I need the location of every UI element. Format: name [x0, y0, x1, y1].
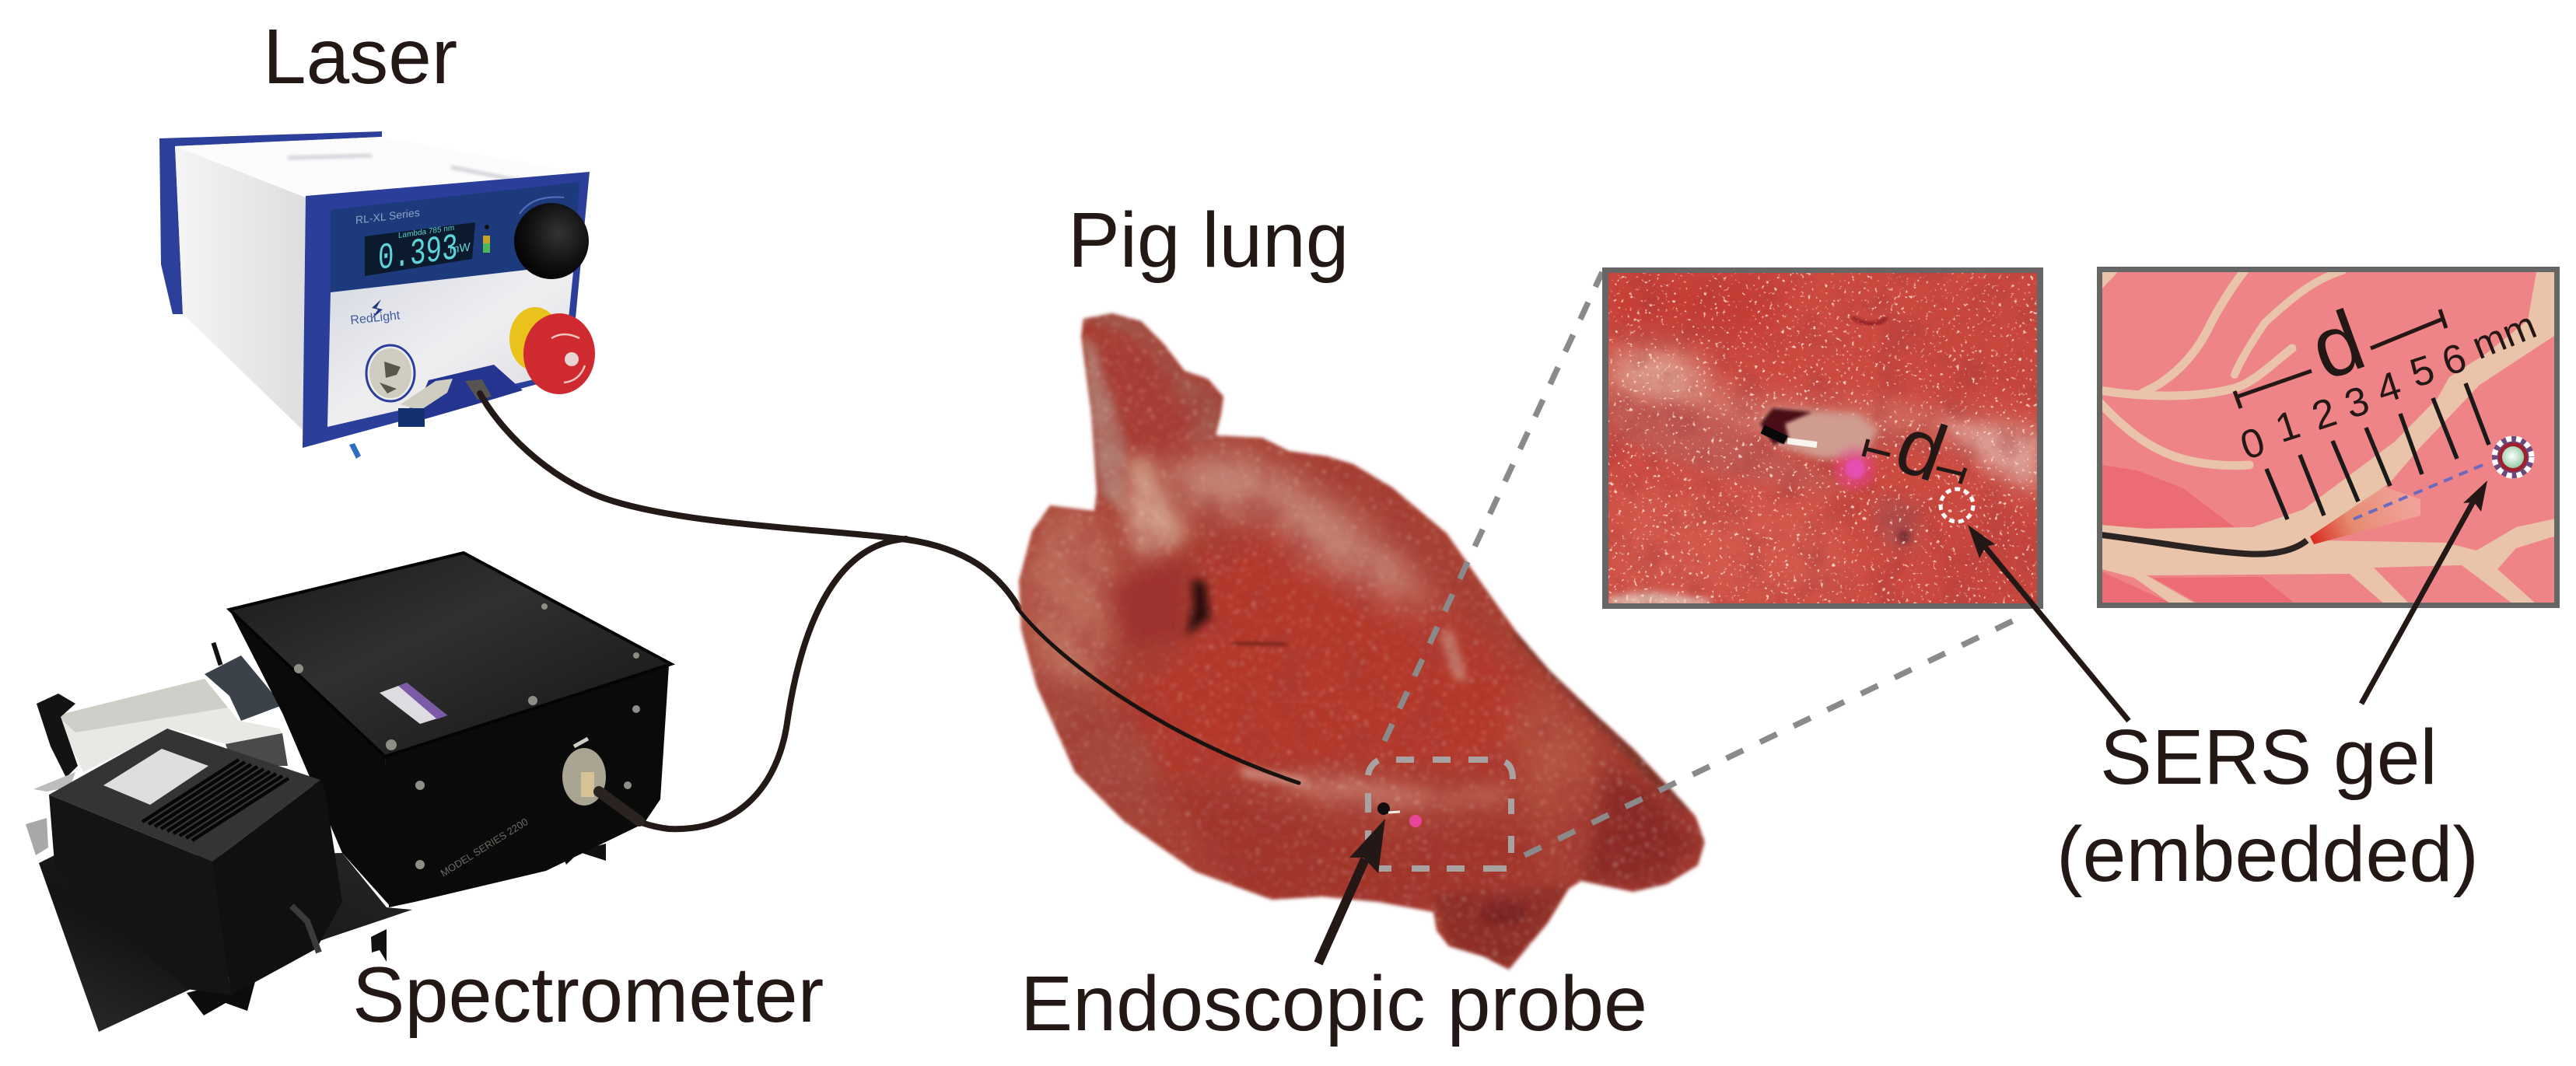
main box front face	[385, 666, 669, 907]
arrow: endoscopic probe	[1318, 819, 1385, 963]
gel marker	[1941, 489, 1973, 522]
laser series label: RL-XL Series	[355, 206, 420, 226]
scale numbers: 1	[2270, 402, 2305, 452]
zoom guide line: lower	[1524, 620, 2015, 855]
laser logo	[350, 299, 401, 327]
icon: laser unit	[159, 131, 595, 459]
foot	[349, 443, 361, 459]
scale numbers	[2235, 303, 2543, 469]
power box vents	[142, 760, 289, 841]
beam path	[2353, 465, 2483, 519]
scale numbers: 3	[2340, 378, 2375, 428]
probe tip and laser spot	[1377, 802, 1422, 827]
emergency stop button	[509, 307, 595, 394]
camera shadow plate	[226, 733, 288, 766]
power box right face	[212, 780, 342, 995]
small airway branches	[2100, 268, 2343, 466]
power box left face	[49, 795, 231, 995]
panel: photo inset	[1602, 267, 2043, 609]
arrow: SERS gel to photo inset	[1968, 525, 2129, 721]
probe opening slit	[1237, 766, 1310, 787]
camera body	[57, 679, 284, 772]
optical fibre: laser to lung	[480, 393, 1019, 608]
power box top	[49, 729, 320, 862]
scale ticks	[2266, 383, 2489, 519]
camera coupler	[205, 655, 282, 721]
label: Spectrometer: Spectrometer	[352, 952, 824, 1039]
photo: pig lung	[1003, 311, 1711, 972]
fibre port	[408, 365, 523, 424]
bronchus cavity	[1112, 557, 1190, 648]
SERS gel marker	[2492, 436, 2534, 478]
label: SERS gel (embedded): (embedded)	[2056, 811, 2479, 898]
laser back frame	[159, 131, 382, 314]
scale numbers: 5	[2405, 347, 2440, 397]
laser logo: RedLight	[350, 309, 401, 327]
illumination cone	[2310, 487, 2420, 544]
scale numbers: 0	[2235, 419, 2270, 469]
key clip	[398, 379, 453, 427]
region of interest dashed box	[1368, 760, 1513, 869]
screws	[294, 603, 640, 869]
darker tissue regions	[2102, 465, 2298, 606]
laser knob	[514, 197, 589, 279]
distance label d	[2235, 292, 2446, 408]
endoscope probe	[2102, 535, 2307, 554]
label: Endoscopic probe: Endoscopic probe	[1020, 960, 1647, 1047]
endoscopic probe inside lung	[1017, 608, 1299, 783]
main box left face	[229, 610, 391, 907]
laser display: Lambda 785 nm	[398, 224, 454, 240]
inset tissue shading	[1612, 373, 2037, 488]
main box top	[229, 553, 671, 757]
label: Pig lung: Pig lung	[1068, 197, 1349, 284]
airway hole	[1760, 408, 1878, 459]
laser key	[366, 345, 415, 401]
panel: schematic inset	[2097, 267, 2560, 610]
icon: spectrometer	[26, 553, 671, 1032]
airway trunk	[2102, 268, 2559, 610]
scale numbers: 4	[2371, 363, 2406, 413]
base plate	[39, 853, 412, 1032]
power box sticker	[103, 749, 208, 805]
arrow: SERS gel to schematic inset	[2361, 481, 2487, 704]
camera clip	[37, 694, 78, 778]
distance marker d: d	[1885, 400, 1958, 499]
purple sticker	[380, 683, 447, 724]
scale numbers: mm	[2466, 303, 2543, 368]
laser LEDs	[483, 225, 490, 253]
label: SERS gel (embedded)	[2056, 714, 2479, 898]
laser lower panel	[327, 264, 574, 427]
label: SERS gel (embedded): SERS gel	[2100, 714, 2438, 801]
laser display	[365, 222, 475, 281]
laser spot	[1835, 449, 1875, 489]
lung silhouette	[1019, 313, 1705, 970]
zoom guide line: upper	[1384, 272, 1602, 741]
lung texture	[1027, 352, 1679, 920]
distance label d: d	[2298, 292, 2376, 399]
scale numbers: 2	[2307, 390, 2342, 439]
scale numbers: 6	[2437, 335, 2472, 385]
fibre connector	[465, 379, 492, 400]
label: Laser: Laser	[263, 13, 457, 100]
feet	[371, 929, 387, 962]
laser display: mW	[450, 240, 471, 257]
laser side panel	[175, 146, 306, 430]
laser display: 0.393	[378, 228, 458, 281]
optical fibre: spectrometer to junction	[595, 539, 906, 829]
lung body shading	[1139, 541, 1514, 768]
device text: MODEL SERIES 2200	[439, 816, 530, 879]
spectrometer port	[562, 739, 606, 806]
laser control panel	[331, 182, 579, 292]
laser front frame	[303, 172, 590, 448]
laser top	[175, 137, 576, 196]
